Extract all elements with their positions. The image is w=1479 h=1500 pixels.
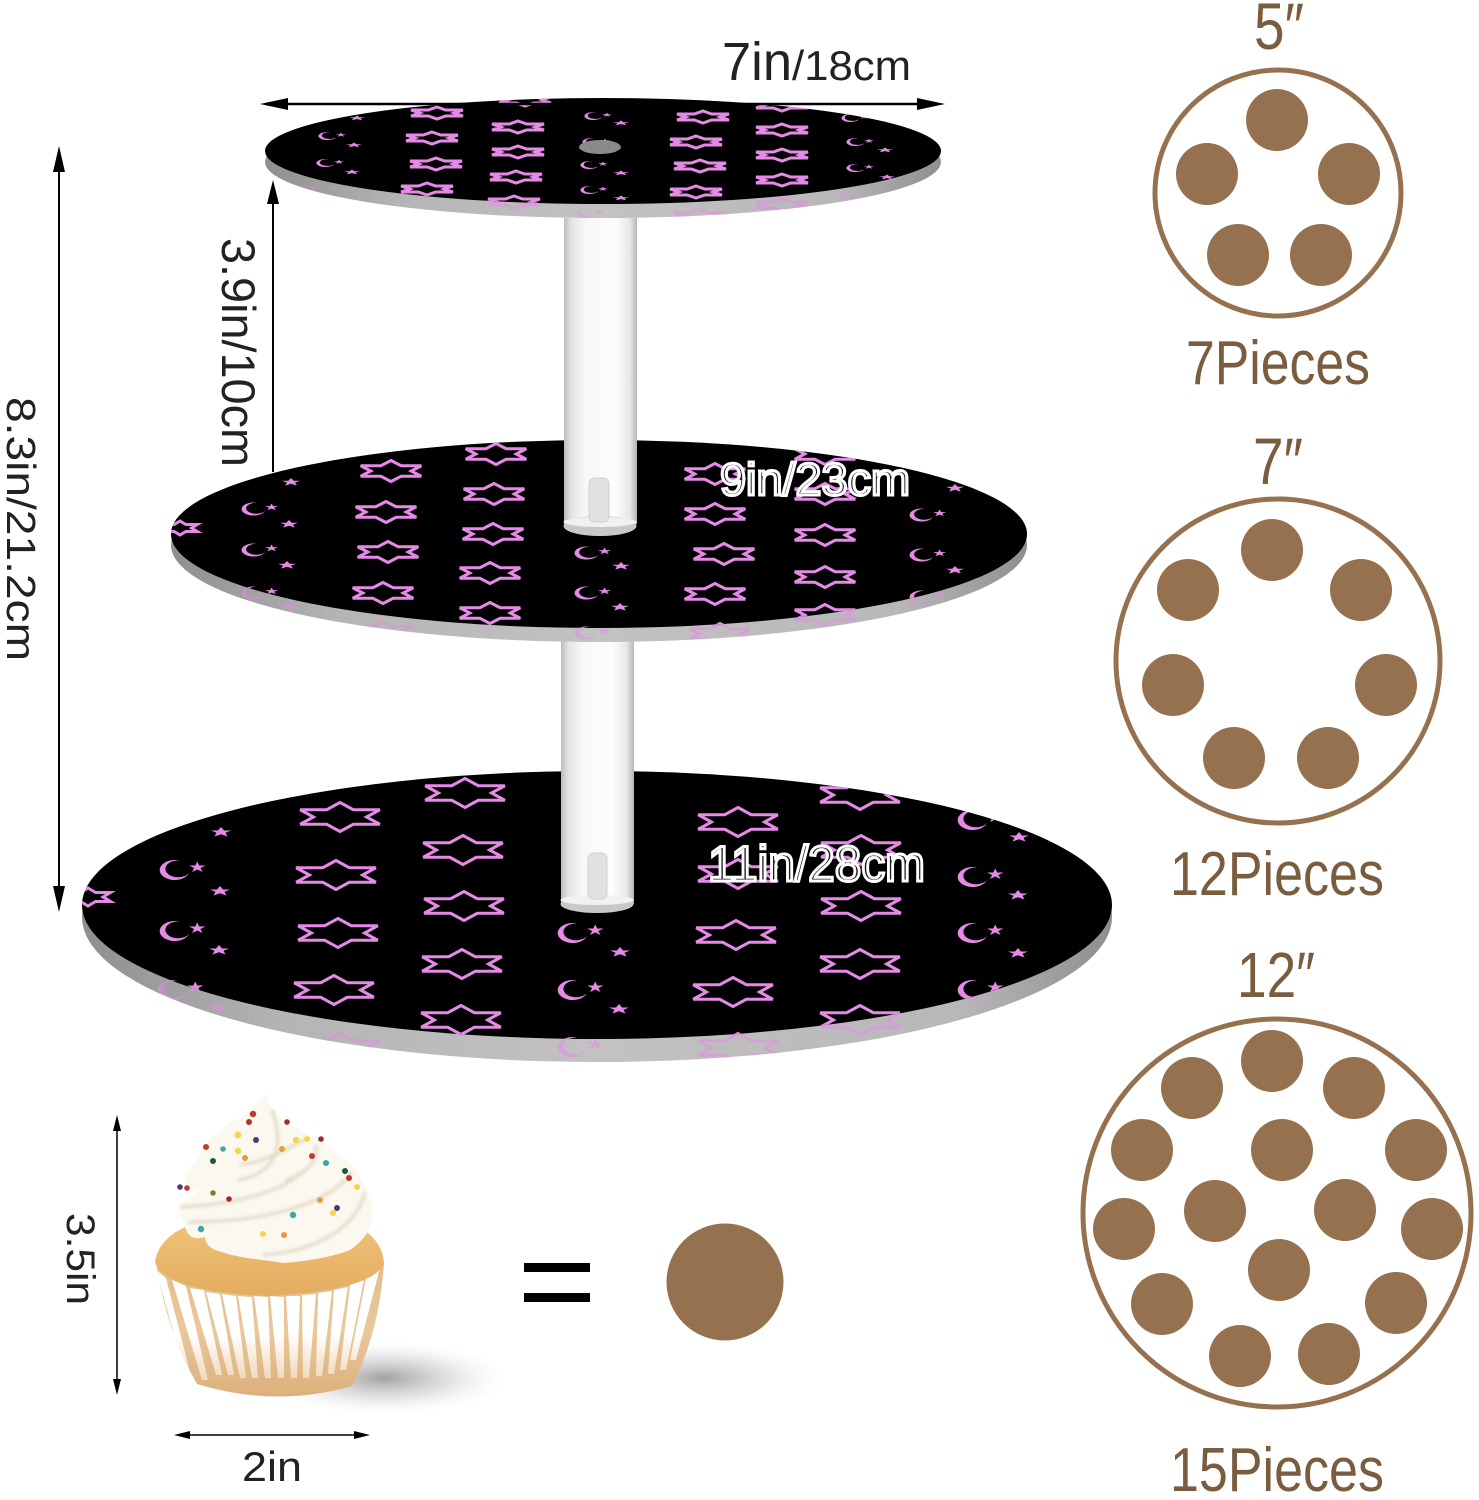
upper support post bbox=[564, 218, 637, 536]
label: middle tier width: 9in/23cm bbox=[720, 454, 910, 505]
label: cupcake width: 2in bbox=[242, 1443, 302, 1490]
arrow: cupcake width bbox=[174, 1431, 370, 1439]
label: tier spacing: 3.9in/10cm bbox=[212, 238, 265, 467]
arrow: top tier width bbox=[260, 98, 945, 110]
icon: cupcake footprint dot bbox=[666, 1224, 784, 1340]
heading: 7 inch: 7″ bbox=[1253, 424, 1303, 498]
label: top tier width: /18cm bbox=[792, 42, 911, 89]
bottom tier disc bbox=[65, 771, 1112, 1062]
middle tier disc bbox=[163, 440, 1027, 644]
lower support post bbox=[560, 636, 634, 913]
arrow: total height bbox=[53, 146, 65, 912]
equals sign bbox=[524, 1263, 590, 1302]
label: 12 pieces: 12Pieces bbox=[1170, 840, 1384, 909]
top tier disc bbox=[265, 94, 941, 220]
label: bottom tier width: 11in/28cm bbox=[708, 836, 925, 892]
label: top tier width bbox=[722, 32, 911, 92]
heading: 12 inch: 12″ bbox=[1237, 939, 1315, 1011]
diagram: 12 inch tier layout bbox=[1083, 1019, 1471, 1407]
label: cupcake height: 3.5in bbox=[58, 1213, 102, 1305]
diagram: 7 inch tier layout bbox=[1116, 499, 1440, 823]
arrow: tier spacing bbox=[267, 180, 279, 472]
arrow: cupcake height bbox=[113, 1115, 121, 1395]
label: 7 pieces: 7Pieces bbox=[1186, 329, 1370, 398]
label: top tier width: 7in bbox=[722, 32, 792, 92]
diagram: 5 inch tier layout bbox=[1155, 70, 1401, 316]
icon: cupcake bbox=[155, 1093, 505, 1414]
